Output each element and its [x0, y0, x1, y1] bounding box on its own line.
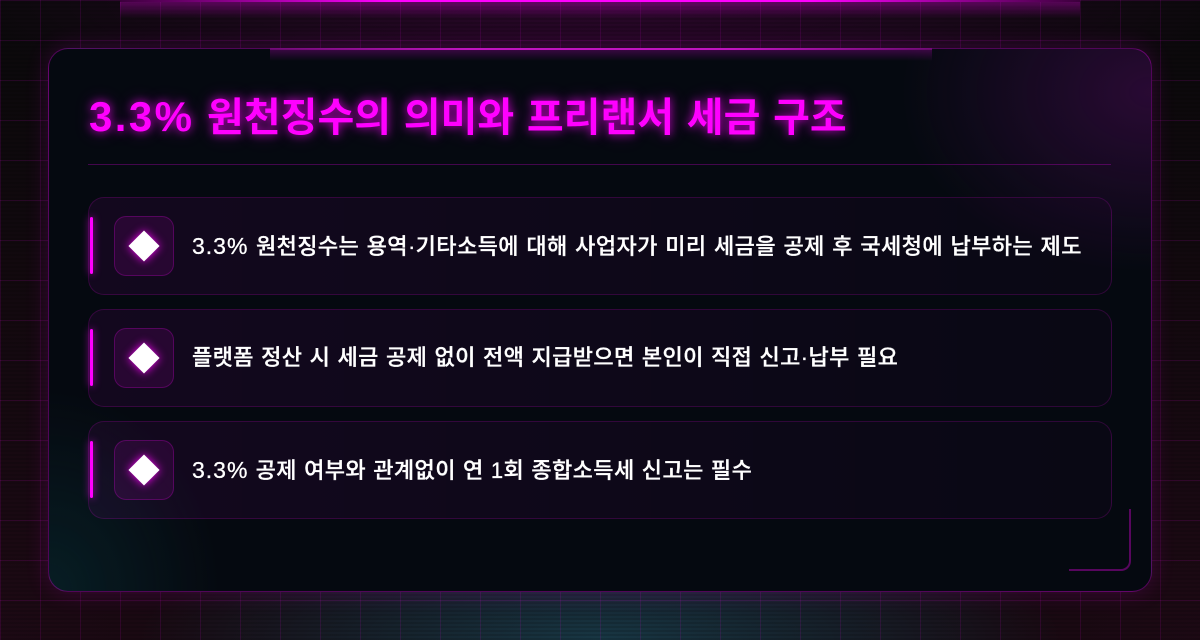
- item text 3: 3.3% 공제 여부와 관계없이 연 1회 종합소득세 신고는 필수: [192, 457, 752, 483]
- top neon glow: [120, 0, 1080, 18]
- list item 2: [88, 309, 1112, 407]
- top neon bar: [120, 0, 1080, 2]
- panel: main card: [48, 48, 1152, 592]
- accent bar 3: [90, 441, 93, 498]
- title: 3.3% 원천징수의 의미와 프리랜서 세금 구조: [89, 93, 847, 140]
- card top line: [270, 48, 932, 50]
- icon: diamond 3: [114, 440, 174, 500]
- item text 2: 플랫폼 정산 시 세금 공제 없이 전액 지급받으면 본인이 직접 신고·납부 필요: [192, 345, 898, 370]
- accent bar 1: [90, 217, 93, 274]
- icon: diamond 2: [114, 328, 174, 388]
- decorative corner bracket: [1069, 509, 1131, 571]
- list item 3: [88, 421, 1112, 519]
- icon: diamond 1: [114, 216, 174, 276]
- list item 1: [88, 197, 1112, 295]
- accent bar 2: [90, 329, 93, 386]
- title divider: [88, 164, 1111, 165]
- item text 1: 3.3% 원천징수는 용역·기타소득에 대해 사업자가 미리 세금을 공제 후 국세청에 납부하는 제도: [192, 233, 1082, 259]
- card top glow: [270, 49, 932, 61]
